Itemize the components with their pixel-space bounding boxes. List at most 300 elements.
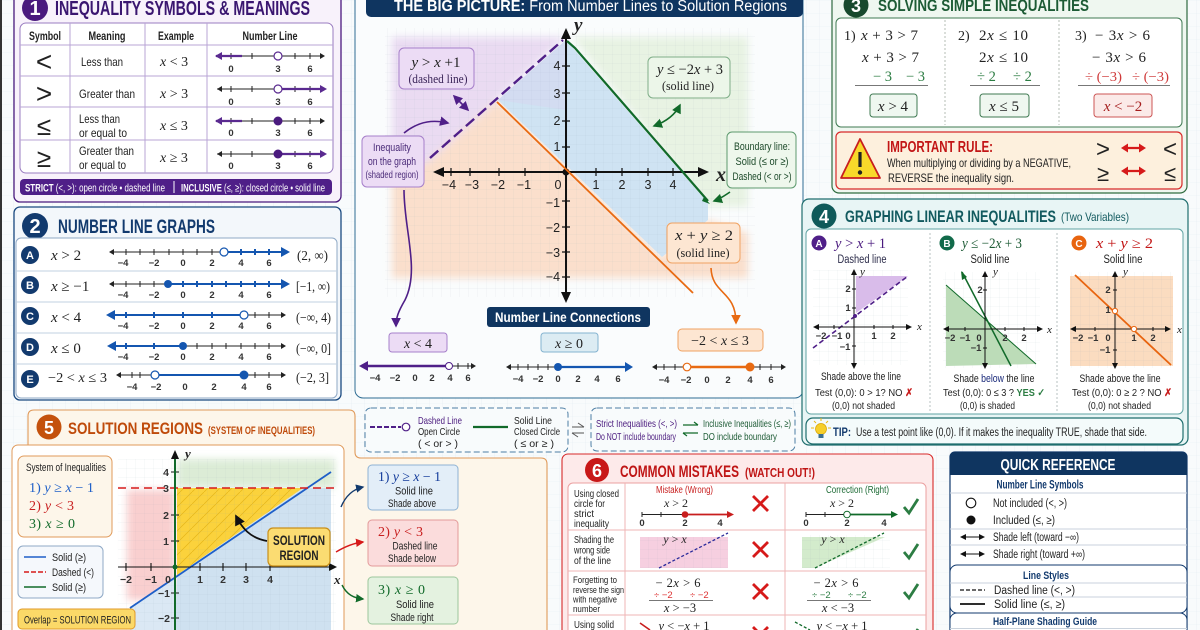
connection x≥0: −4 (513, 374, 524, 385)
boundary lines (430, 40, 563, 158)
graph A: 2 (890, 331, 896, 342)
example 2: ÷ 2 (1013, 69, 1032, 85)
row D: D (26, 342, 34, 354)
graph A: x (916, 321, 922, 333)
row C: −4 (118, 321, 129, 332)
row: closed circle: circle for (574, 499, 606, 510)
important rule: IMPORTANT RULE: (887, 139, 993, 156)
section: half-plane shading guide: Half-Plane Shading Guide (993, 616, 1097, 628)
connection -2<x≤3: 4 (747, 375, 753, 386)
graph C: −1 (1100, 345, 1111, 356)
axes (433, 15, 726, 303)
symbols reversal: > (1096, 136, 1110, 163)
example 3: 3) (1075, 29, 1087, 44)
number line x<3: 6 (307, 64, 313, 75)
connection -2<x≤3: 0 (704, 375, 710, 386)
row A: A (26, 250, 34, 262)
connection x≥0: 4 (594, 374, 600, 385)
row E: 0 (182, 382, 188, 393)
symbols table: Symbol (29, 29, 61, 43)
system of inequalities box: 3) x ≥ 0 (29, 517, 75, 532)
example 1 (844, 28, 928, 117)
legend box: Solid (≥) (52, 552, 86, 564)
callout y > x+1 (399, 48, 474, 89)
card C: (0,0) not shaded (1088, 401, 1151, 412)
graph B: y (992, 266, 998, 278)
example cards (806, 229, 1183, 414)
graph B: −2 (945, 333, 955, 344)
axes: −1 (546, 196, 560, 210)
row: forgetting to reverse: − 2x > 6 (656, 576, 700, 590)
axes: 0 (555, 178, 562, 192)
row A: 2 (209, 258, 215, 269)
row E: 6 (266, 382, 272, 393)
strict vs inclusive bar (20, 179, 332, 195)
number line x≤3: 6 (307, 128, 313, 139)
number line x≤3: 0 (228, 128, 234, 139)
legend: strict vs inclusive: DO include boundary (703, 431, 778, 443)
solution graph: 4 (267, 574, 273, 586)
axes: −2 (546, 221, 560, 235)
graph card (12, 445, 344, 630)
symbols table: < (36, 46, 52, 77)
number line x>3: 3 (275, 97, 281, 108)
heading 2: NUMBER LINE GRAPHS (58, 217, 215, 238)
callout 2: Shade below (388, 553, 436, 565)
row: wrong side: wrong side (573, 544, 610, 556)
badge 3 (844, 0, 868, 18)
section: number line symbols: Number Line Symbols (996, 480, 1084, 492)
card B: y ≤ −2x + 3 (960, 236, 1022, 252)
quick reference header (950, 452, 1187, 475)
row: forgetting to reverse: x < −3 (821, 601, 854, 615)
row: forgetting to reverse: − 2x > 6 (814, 576, 858, 590)
card A: Shade above the line (821, 371, 901, 383)
graph C: x (1176, 324, 1182, 336)
axes: −3 (546, 246, 560, 260)
card C: Solid line (1104, 254, 1142, 266)
panel 4: graphing linear inequalities (802, 199, 1188, 445)
heading 4: (Two Variables) (1061, 210, 1129, 224)
row: closed circle: 4 (717, 518, 723, 529)
row: forgetting to reverse: with negative (572, 594, 617, 606)
graph B: 2 (1002, 333, 1008, 344)
icon: light bulb (811, 418, 831, 438)
example 3: − 3x > 6 (1092, 50, 1146, 66)
connection x<4: x < 4 (403, 337, 432, 352)
symbols table: Less than (81, 55, 123, 69)
solution graph: 3 (243, 574, 249, 586)
example 2 (958, 28, 1040, 117)
strict vs inclusive bar: INCLUSIVE (≤, ≥): closed circle • solid line (181, 182, 325, 194)
row C: (−∞, 4) (296, 311, 331, 326)
connection x<4: −2 (390, 373, 400, 384)
section: number line symbols: Shade left (toward −∞) (993, 532, 1079, 544)
row: closed circle (574, 485, 918, 530)
symbols table: x ≥ 3 (159, 151, 188, 166)
graph A: −1 (832, 331, 843, 342)
row B: B (26, 280, 34, 292)
row: closed circle: x > 2 (829, 496, 854, 510)
callout 2: 2) y < 3 (378, 525, 423, 540)
solution graph: −2 (120, 574, 132, 586)
connection -2<x≤3: 2 (725, 375, 731, 386)
symbols reversal: ≥ (1097, 161, 1109, 186)
row A: −2 (149, 258, 159, 269)
badge 6 (585, 458, 609, 482)
row E (21, 370, 329, 393)
graph C: −1 (1088, 333, 1099, 344)
tip: TIP: (833, 427, 851, 439)
example 3: ÷ (−3) (1085, 70, 1122, 85)
connection -2<x≤3: −2 (681, 375, 691, 386)
row A: x > 2 (50, 248, 81, 264)
callout x+y ≥ 2: (solid line) (676, 245, 730, 260)
connection x≥0: 6 (615, 374, 621, 385)
callout 1: Shade above (388, 498, 436, 510)
connection x≥0 (506, 333, 633, 385)
card B: B (943, 239, 951, 250)
graph C: 0 (1105, 333, 1111, 344)
number line x≤3: 3 (275, 128, 281, 139)
symbols table: Example (158, 29, 194, 43)
row D: (−∞, 0] (296, 342, 331, 357)
row: closed circle: 0 (639, 518, 645, 529)
example 2: 2) (958, 29, 970, 44)
symbols table: ≥ (37, 143, 51, 173)
graph C: 1 (1131, 333, 1137, 344)
row: wrong side: y > x (662, 532, 687, 546)
row C: x < 4 (50, 310, 82, 326)
example 1: − 3 (873, 69, 892, 85)
connection x≥0: −2 (533, 374, 543, 385)
connection -2<x≤3: −2 < x ≤ 3 (691, 334, 749, 349)
graph A: −2 (816, 331, 826, 342)
arrow to region (236, 516, 267, 541)
axes: 2 (619, 178, 626, 192)
row E: −4 (127, 382, 138, 393)
icon: correct mark (904, 544, 918, 558)
symbols table: Greater than (79, 87, 135, 101)
axes: 3 (645, 178, 652, 192)
row D: 4 (238, 352, 244, 363)
number line x≥3 (217, 150, 327, 172)
graph A: 1 (845, 303, 851, 314)
row D (21, 338, 331, 363)
callout inequality on the graph: Inequality (373, 142, 411, 154)
axes: 2 (554, 114, 561, 128)
solution graph: 3 (163, 483, 169, 495)
connection x<4 (359, 333, 476, 384)
graph B: 0 (976, 333, 982, 344)
row D: 6 (266, 352, 272, 363)
example 1: x + 3 > 7 (860, 28, 918, 44)
axes: 4 (554, 59, 561, 73)
panel 1: inequality symbols and meanings (14, 0, 341, 202)
legend: line types: Dashed Line (418, 415, 462, 427)
row: closed circle: 4 (881, 518, 887, 529)
row C: 6 (266, 321, 272, 332)
graph C (1070, 266, 1182, 369)
example 2: 2x ≤ 10 (979, 28, 1028, 44)
section: line styles: Dashed line (<, >) (994, 585, 1075, 597)
connection x<4: 4 (447, 373, 453, 384)
solution graph: −1 (145, 574, 157, 586)
badge 5: 5 (44, 418, 54, 438)
icon: correct mark (904, 584, 918, 598)
callout 3: 3) x ≥ 0 (378, 583, 425, 598)
solution graph (118, 446, 341, 630)
row D: −4 (118, 352, 129, 363)
symbols table: or equal to (79, 126, 127, 140)
row: wrong side: Shading the (574, 534, 614, 546)
graph C: 2 (1150, 333, 1156, 344)
row B: 6 (266, 290, 272, 301)
row: forgetting to reverse: number (573, 604, 600, 615)
row: closed circle: inequality (574, 519, 609, 530)
example 1: 1) (844, 29, 856, 44)
callout 1: 1) y ≥ x − 1 (378, 470, 441, 485)
icon: correct mark (904, 499, 918, 513)
legend: strict vs inclusive: Inclusive Inequalities (≤, ≥) (703, 418, 791, 430)
arrows (396, 96, 736, 326)
badge 5 (36, 414, 62, 440)
graph B: −1 (960, 333, 971, 344)
panel: the big picture (355, 0, 803, 398)
symbols table (20, 23, 333, 173)
panel 5: solution regions (12, 410, 547, 630)
callout y ≤ -2x+3: (solid line) (662, 78, 714, 93)
example 1: x + 3 > 7 (861, 50, 920, 66)
row B (21, 276, 330, 301)
solution region label: REGION (280, 548, 318, 563)
axes: 1 (593, 178, 600, 192)
axes: −4 (546, 270, 560, 284)
symbols table: x ≤ 3 (159, 119, 188, 134)
graph B: x (1046, 324, 1052, 336)
card C: x + y ≥ 2 (1095, 236, 1153, 252)
row D: 2 (209, 352, 215, 363)
tip (806, 418, 1183, 444)
symbols reversal: < (1163, 136, 1177, 163)
solution graph: 4 (163, 467, 169, 479)
axes: −3 (465, 178, 479, 192)
row: wrong side (573, 532, 918, 568)
example 1: − 3 (906, 69, 925, 85)
number line x≤3 (215, 116, 325, 139)
row: forgetting to reverse (572, 575, 918, 615)
solution graph: 1 (163, 536, 169, 548)
connection x≥0: x ≥ 0 (554, 337, 583, 352)
section: line styles (950, 565, 1187, 613)
row: forgetting to reverse: Forgetting to (573, 575, 617, 586)
symbols reversal: ≤ (1164, 161, 1176, 186)
arrows to callouts (336, 487, 363, 599)
legend: strict vs inclusive: Do NOT include boundary (596, 431, 676, 443)
row: forgetting to reverse: reverse the sign (573, 585, 624, 596)
overlap label (18, 609, 135, 629)
row E: (−2, 3] (296, 371, 329, 386)
card B: Shade below the line (954, 373, 1034, 385)
solution graph: y (183, 446, 191, 461)
row A: 0 (180, 258, 186, 269)
card A: y > x + 1 (833, 236, 886, 252)
row C (21, 307, 331, 332)
system of inequalities box (18, 456, 112, 537)
row B: 2 (209, 290, 215, 301)
connection x≥0: 2 (575, 374, 581, 385)
callout y > x+1: y > x +1 (409, 55, 461, 71)
example 3: x < −2 (1103, 99, 1142, 115)
axes: −4 (442, 178, 456, 192)
graph rows (16, 238, 337, 398)
graph C: 2 (1105, 285, 1111, 296)
row: closed circle: x > 2 (663, 496, 688, 510)
row D: −2 (149, 352, 159, 363)
axes: 4 (670, 178, 677, 192)
badge 6: 6 (592, 461, 602, 481)
symbols table: Less than (79, 112, 120, 126)
graph C: 1 (1105, 305, 1111, 316)
row E: 2 (211, 382, 217, 393)
card B: Test (0,0): 0 ≤ 3 ? YES ✓ (943, 387, 1045, 399)
row C: C (26, 311, 34, 323)
row B: 4 (238, 290, 244, 301)
card C: Test (0,0): 0 ≥ 2 ? NO ✗ (1072, 387, 1172, 399)
row E: 4 (241, 382, 247, 393)
row: using solid (574, 619, 918, 630)
heading 4: GRAPHING LINEAR INEQUALITIES (845, 207, 1056, 226)
panel 6: common mistakes (562, 454, 933, 630)
solution graph: 2 (220, 574, 226, 586)
number line x<3: 3 (275, 64, 281, 75)
symbols table: or equal to (79, 158, 126, 172)
section: line styles: Solid line (≤, ≥) (994, 599, 1065, 611)
row C: 2 (209, 321, 215, 332)
graph A: 0 (845, 331, 851, 342)
connection -2<x≤3 (652, 329, 786, 386)
badge 4: 4 (819, 207, 829, 227)
axes: 3 (554, 87, 561, 101)
card A: (0,0) not shaded (832, 401, 895, 412)
row: closed circle: Mistake (Wrong) (656, 485, 713, 496)
system of inequalities box: System of Inequalities (26, 462, 106, 474)
legend: line types: Closed Circle (514, 426, 560, 438)
example 1: x > 4 (877, 99, 909, 115)
row C: 0 (180, 321, 186, 332)
row: forgetting to reverse: ÷ −2 (654, 590, 673, 601)
card C (1070, 236, 1182, 412)
row: forgetting to reverse: x > −3 (663, 601, 696, 615)
axes: −2 (491, 178, 505, 192)
mistakes table (568, 483, 926, 630)
callout boundary line: Dashed (< or >) (732, 171, 792, 183)
graph C: y (1122, 266, 1128, 278)
graph B: 2 (977, 285, 983, 296)
callout 1: Solid line (395, 486, 433, 498)
callout y ≤ -2x+3: y ≤ −2x + 3 (655, 62, 723, 78)
row: wrong side: y > x (820, 532, 845, 546)
row E: −2 < x ≤ 3 (48, 371, 107, 386)
legend box: Solid (≥) (52, 582, 86, 594)
card A: Test (0,0): 0 > 1? NO ✗ (815, 387, 913, 399)
callout 2 (368, 520, 458, 566)
row E: E (26, 374, 34, 386)
graph B: −1 (971, 343, 982, 354)
callout 3: Shade right (390, 612, 434, 624)
legend: line types: Open Circle (418, 426, 460, 438)
legend: strict vs inclusive: Strict Inequalities (<, >) (596, 418, 677, 430)
card B: (0,0) is shaded (960, 401, 1015, 412)
worked examples (836, 18, 1182, 127)
solution graph: −2 (158, 613, 170, 625)
card B: Solid line (970, 254, 1010, 266)
symbols table: x < 3 (159, 55, 188, 70)
row A: (2, ∞) (297, 249, 328, 264)
symbols table: Number Line (242, 29, 298, 43)
strict vs inclusive bar: STRICT (<, >): open circle • dashed line (25, 182, 165, 194)
callout boundary line: Solid (≤ or ≥) (736, 156, 788, 168)
callout 3 (368, 577, 458, 624)
section: number line symbols: Shade right (toward +∞) (993, 549, 1085, 561)
panel: quick reference (950, 452, 1187, 630)
row: closed circle: strict (574, 509, 594, 520)
legend: line types (365, 408, 568, 452)
system of inequalities box: 1) y ≥ x − 1 (29, 481, 94, 496)
number line connections label (487, 307, 650, 327)
icon: warning triangle (841, 139, 880, 178)
axes: y (572, 15, 583, 36)
connection x<4: 0 (412, 373, 418, 384)
section: half-plane shading guide (950, 613, 1187, 630)
example 2: x ≤ 5 (988, 99, 1019, 115)
callout 3: Solid line (396, 599, 434, 611)
callout x+y ≥ 2: x + y ≥ 2 (674, 228, 733, 244)
solution graph: 0 (165, 574, 171, 586)
panel 2: number line graphs (14, 207, 341, 400)
badge 1 (22, 0, 48, 21)
important rule: REVERSE the inequality sign. (888, 171, 1014, 185)
number line x<3 (215, 52, 325, 75)
number line x>3: 6 (307, 97, 313, 108)
graph B: 2 (1021, 333, 1027, 344)
row C: 4 (238, 321, 244, 332)
coordinate plane (385, 15, 755, 303)
heading 5: (SYSTEM OF INEQUALITIES) (208, 425, 315, 437)
connection -2<x≤3: 6 (768, 375, 774, 386)
legend: strict vs inclusive (591, 408, 795, 451)
graph B (943, 266, 1052, 369)
row: closed circle: Correction (Right) (826, 485, 889, 496)
callout boundary line: Boundary line: (734, 141, 790, 153)
callout y ≤ -2x+3 (648, 57, 730, 98)
number line x<3: 0 (228, 64, 234, 75)
callout inequality on the graph (362, 136, 424, 187)
solution graph: −1 (158, 588, 170, 600)
symbols table: Greater than (79, 144, 134, 158)
row D: x ≤ 0 (50, 341, 81, 357)
badge 4 (812, 204, 836, 228)
graph A (813, 266, 922, 369)
row: forgetting to reverse: ÷ −2 (848, 590, 867, 601)
symbols table: Meaning (88, 29, 126, 43)
panel 3: solving simple inequalities (832, 0, 1187, 193)
row B: −4 (118, 290, 129, 301)
row: closed circle: Using closed (574, 489, 619, 500)
axes: x (715, 164, 726, 186)
icon: wrong mark (753, 542, 768, 557)
important rule: When multiplying or dividing by a NEGATIVE, (887, 156, 1071, 170)
